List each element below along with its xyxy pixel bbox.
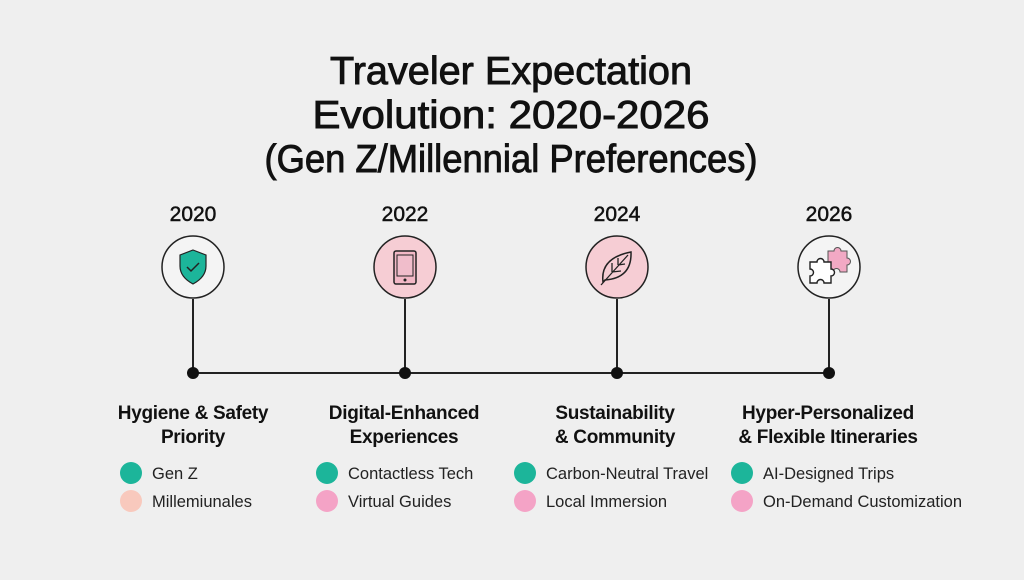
- legend bullets: Virtual Guides: [348, 493, 451, 511]
- headings: & Community: [555, 427, 676, 448]
- year labels: 2022: [382, 203, 428, 226]
- year labels: 2026: [806, 203, 852, 226]
- legend bullets: [120, 462, 962, 512]
- year labels: 2024: [594, 203, 641, 226]
- year labels: 2020: [170, 203, 216, 226]
- legend bullets: Carbon-Neutral Travel: [546, 465, 708, 483]
- headings: Hyper-Personalized: [742, 403, 914, 424]
- legend bullets: Millemiunales: [152, 493, 252, 511]
- headings: Sustainability: [555, 403, 675, 424]
- headings: [118, 403, 918, 448]
- title: [264, 50, 758, 181]
- icon: tablet: [374, 236, 436, 298]
- headings: Experiences: [350, 427, 458, 448]
- headings: Digital-Enhanced: [329, 403, 479, 424]
- title: Evolution: 2020-2026: [312, 94, 710, 137]
- icon: puzzle: [798, 236, 860, 298]
- headings: Hygiene & Safety: [118, 403, 269, 424]
- year labels: [170, 203, 852, 226]
- legend bullets: On-Demand Customization: [763, 493, 962, 511]
- icon: leaf: [586, 236, 648, 298]
- timeline axis: [193, 299, 829, 373]
- legend bullets: Gen Z: [152, 465, 198, 483]
- headings: & Flexible Itineraries: [738, 427, 918, 448]
- legend bullets: AI-Designed Trips: [763, 465, 894, 483]
- title: (Gen Z/Millennial Preferences): [264, 138, 758, 181]
- legend bullets: Local Immersion: [546, 493, 667, 511]
- timeline dots: [187, 367, 835, 379]
- headings: Priority: [161, 427, 226, 448]
- title: Traveler Expectation: [330, 50, 692, 93]
- legend bullets: Contactless Tech: [348, 465, 473, 483]
- icon: shield: [162, 236, 224, 298]
